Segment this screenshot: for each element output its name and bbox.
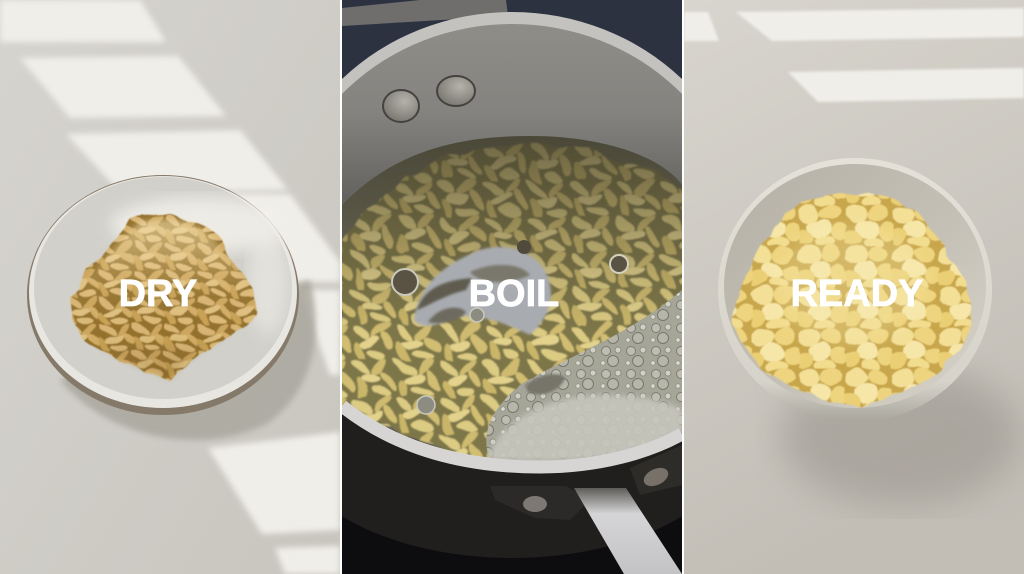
window light patches: [0, 0, 340, 574]
label: BOIL: BOIL: [469, 273, 559, 315]
panel: orzo boiling in a pot: [342, 0, 682, 574]
dry orzo pile: [71, 215, 256, 381]
bowl: [718, 158, 992, 422]
label: READY: READY: [790, 273, 924, 315]
pot handle at back: [342, 0, 508, 26]
bowl shadow: [780, 365, 1020, 505]
pot front rim highlight: [342, 406, 682, 467]
plate shadow: [60, 280, 316, 440]
foam bubbles: [486, 290, 682, 462]
pan handle: [490, 445, 682, 574]
stove background: [342, 516, 682, 574]
label: DRY: DRY: [119, 273, 197, 315]
pot rim: [342, 12, 682, 428]
rivets: [383, 76, 475, 122]
window light patches: [684, 8, 1024, 102]
panel: ready cooked orzo in a bowl: [684, 0, 1024, 574]
pot inner wall: [342, 24, 682, 449]
cooked orzo: [733, 194, 973, 405]
panel: dry orzo on a plate: [0, 0, 340, 574]
divider gaps: [340, 0, 342, 574]
pot lower body: [342, 414, 682, 558]
water with orzo: [335, 136, 690, 463]
plate: [27, 175, 299, 415]
panel background: [0, 0, 340, 574]
panel background: [684, 0, 1024, 574]
open water: [414, 247, 551, 335]
